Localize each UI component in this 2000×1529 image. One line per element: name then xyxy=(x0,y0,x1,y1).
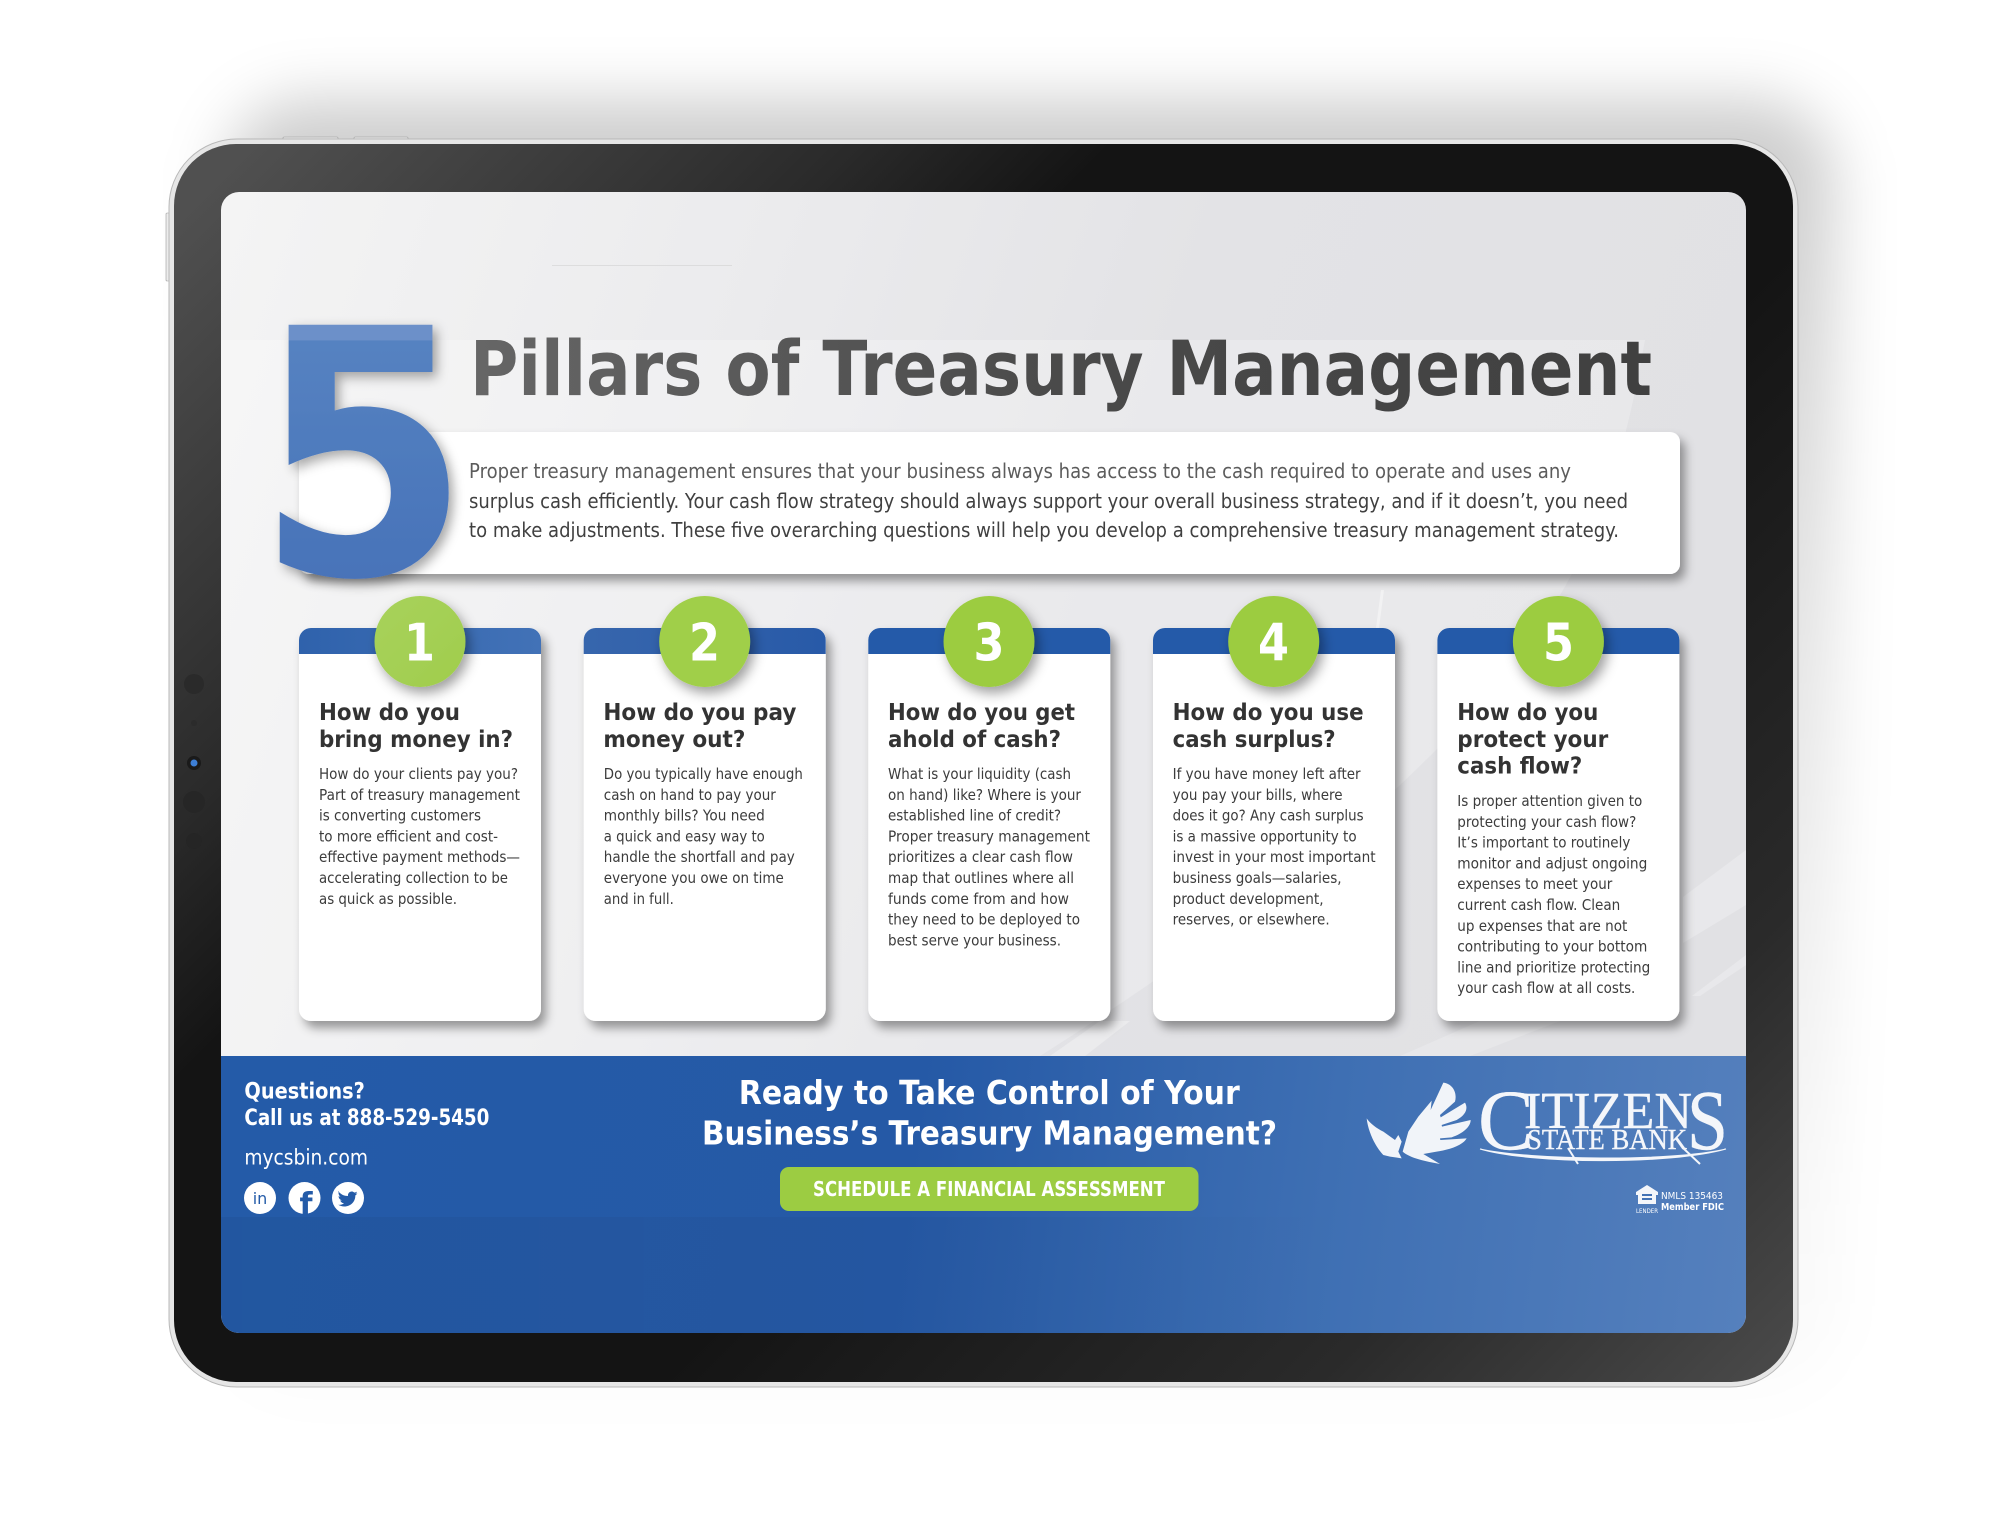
card header bar xyxy=(868,628,1110,654)
body text xyxy=(604,765,803,908)
device shadow xyxy=(225,100,1835,1390)
card header bar xyxy=(584,628,826,654)
body text: to more efficient and cost- xyxy=(319,827,498,845)
heading xyxy=(1457,700,1609,780)
big numeral 5: 5 xyxy=(256,257,470,655)
card header bar xyxy=(1437,628,1679,654)
body text: current cash flow. Clean xyxy=(1457,896,1620,914)
heading: How do you xyxy=(1457,700,1598,726)
card body xyxy=(1437,628,1679,1021)
body text: and in full. xyxy=(604,890,674,908)
body text: protecting your cash flow? xyxy=(1457,813,1636,831)
body text: handle the shortfall and pay xyxy=(604,848,795,866)
icon: linkedin xyxy=(244,1182,276,1214)
body text: What is your liquidity (cash xyxy=(888,765,1071,783)
heading: How do you xyxy=(319,700,460,726)
body text: reserves, or elsewhere. xyxy=(1173,911,1330,929)
legal text: NMLS 135463 xyxy=(1661,1191,1723,1202)
card 1 xyxy=(299,596,541,1021)
number badge 1: 1 xyxy=(404,614,435,674)
icon: equal housing xyxy=(1636,1185,1658,1215)
button: schedule assessment: SCHEDULE A FINANCIAL ASSESSMENT xyxy=(813,1177,1165,1201)
heading: How do you use xyxy=(1173,700,1364,726)
icon: facebook: f xyxy=(299,1187,313,1222)
contact block xyxy=(244,1080,489,1170)
body text: monitor and adjust ongoing xyxy=(1457,854,1647,872)
body text: is converting customers xyxy=(319,807,481,825)
body text: everyone you owe on time xyxy=(604,869,784,887)
contact block: Call us at 888-529-5450 xyxy=(244,1106,489,1131)
body text xyxy=(1173,765,1376,929)
body text: prioritizes a clear cash flow xyxy=(888,848,1073,866)
card body xyxy=(584,628,826,1021)
icon: equal housing: LENDER xyxy=(1636,1208,1658,1215)
body text: map that outlines where all xyxy=(888,869,1074,887)
body text: your cash flow at all costs. xyxy=(1457,979,1635,997)
side button top 2 xyxy=(354,137,408,141)
heading: protect your xyxy=(1457,727,1609,753)
side button top 1 xyxy=(283,137,338,141)
card body xyxy=(1153,628,1395,1021)
body text: invest in your most important xyxy=(1173,848,1376,866)
body text: line and prioritize protecting xyxy=(1457,958,1650,976)
body text: product development, xyxy=(1173,890,1324,908)
heading xyxy=(1173,700,1364,753)
number badge 3: 3 xyxy=(974,614,1004,674)
screen background xyxy=(221,192,1746,1333)
body text: Proper treasury management xyxy=(888,827,1090,845)
contact block: mycsbin.com xyxy=(244,1146,368,1170)
device body xyxy=(174,144,1793,1382)
heading: bring money in? xyxy=(319,727,513,753)
call to action heading: Business’s Treasury Management? xyxy=(702,1114,1277,1152)
logo: citizens state bank: ITIZEN xyxy=(1524,1083,1692,1140)
logo: citizens state bank: C xyxy=(1478,1072,1534,1168)
number badge 4 xyxy=(1228,596,1319,687)
card 5 xyxy=(1437,596,1679,1021)
body text xyxy=(888,765,1090,949)
title: Pillars of Treasury Management xyxy=(470,325,1652,413)
body text: It’s important to routinely xyxy=(1457,834,1630,852)
body text: on hand) like? Where is your xyxy=(888,786,1082,804)
footer lower shade xyxy=(221,1217,1746,1333)
body text: up expenses that are not xyxy=(1457,917,1627,935)
heading: How do you get xyxy=(888,700,1075,726)
number badge 3 xyxy=(944,596,1034,687)
device rim xyxy=(169,139,1798,1387)
side button left xyxy=(166,213,171,281)
legal text xyxy=(1661,1191,1724,1213)
intro box xyxy=(299,432,1680,574)
footer background xyxy=(221,1056,1746,1333)
heading: How do you pay xyxy=(603,700,796,726)
card body xyxy=(868,628,1110,1021)
card 2 xyxy=(584,596,826,1021)
number badge 5 xyxy=(1513,596,1604,687)
contact block: Questions? xyxy=(244,1080,365,1104)
heading: money out? xyxy=(603,727,745,753)
card 3 xyxy=(868,596,1110,1021)
number badge 2: 2 xyxy=(689,614,720,674)
icon: facebook xyxy=(288,1182,320,1222)
number badge 2 xyxy=(659,596,750,687)
icon: twitter xyxy=(332,1182,364,1214)
logo: citizens state bank xyxy=(1478,1072,1728,1168)
body text: is a massive opportunity to xyxy=(1173,827,1357,845)
number badge 4: 4 xyxy=(1258,614,1289,674)
body text: you pay your bills, where xyxy=(1173,786,1343,804)
button: schedule assessment xyxy=(780,1167,1198,1211)
body text: If you have money left after xyxy=(1173,765,1361,783)
screen xyxy=(221,192,1746,1333)
logo: citizens state bank: S xyxy=(1687,1072,1728,1168)
intro text: Proper treasury management ensures that your business always has access to the cash required to operate and uses any xyxy=(469,459,1571,483)
body text: best serve your business. xyxy=(888,931,1061,949)
intro text: to make adjustments. These five overarching questions will help you develop a comprehensive treasury management strategy. xyxy=(469,518,1619,542)
body text: they need to be deployed to xyxy=(888,911,1080,929)
body text xyxy=(1457,792,1650,997)
body text: expenses to meet your xyxy=(1457,875,1613,893)
legal text: Member FDIC xyxy=(1661,1202,1724,1213)
call to action heading xyxy=(702,1074,1277,1152)
logo: citizens state bank: STATE BANK xyxy=(1527,1124,1687,1156)
body text: effective payment methods— xyxy=(319,848,520,866)
body text: a quick and easy way to xyxy=(604,827,765,845)
heading: ahold of cash? xyxy=(888,727,1061,753)
icon: linkedin: in xyxy=(253,1189,267,1208)
intro text xyxy=(469,459,1628,542)
heading xyxy=(603,700,796,753)
heading: cash flow? xyxy=(1457,754,1582,780)
card header bar xyxy=(299,628,541,654)
body text: business goals—salaries, xyxy=(1173,869,1342,887)
body text: does it go? Any cash surplus xyxy=(1173,807,1364,825)
card header bar xyxy=(1153,628,1395,654)
tablet device xyxy=(166,137,1798,1387)
body text: contributing to your bottom xyxy=(1457,938,1647,956)
heading xyxy=(319,700,513,753)
camera and sensors xyxy=(183,674,205,849)
body text: How do your clients pay you? xyxy=(319,765,518,783)
card body xyxy=(299,628,541,1021)
number badge 1 xyxy=(374,596,466,687)
footer band xyxy=(221,1056,1746,1333)
intro text: surplus cash efficiently. Your cash flow strategy should always support your overall business strategy, and if it doesn’t, you need xyxy=(469,489,1628,513)
body text: accelerating collection to be xyxy=(319,869,508,887)
body text: Is proper attention given to xyxy=(1457,792,1642,810)
number badge 5: 5 xyxy=(1543,614,1574,674)
body text: funds come from and how xyxy=(888,890,1069,908)
body text: established line of credit? xyxy=(888,807,1061,825)
call to action heading: Ready to Take Control of Your xyxy=(739,1074,1240,1112)
body text: Do you typically have enough xyxy=(604,765,803,783)
light sweep background shapes xyxy=(221,265,1746,1056)
heading: cash surplus? xyxy=(1173,727,1336,753)
logo: eagle wings xyxy=(1367,1083,1471,1164)
body text: as quick as possible. xyxy=(319,890,457,908)
body text xyxy=(319,765,520,908)
card 4 xyxy=(1153,596,1395,1021)
body text: cash on hand to pay your xyxy=(604,786,776,804)
heading xyxy=(888,700,1075,753)
body text: Part of treasury management xyxy=(319,786,520,804)
body text: monthly bills? You need xyxy=(604,807,765,825)
